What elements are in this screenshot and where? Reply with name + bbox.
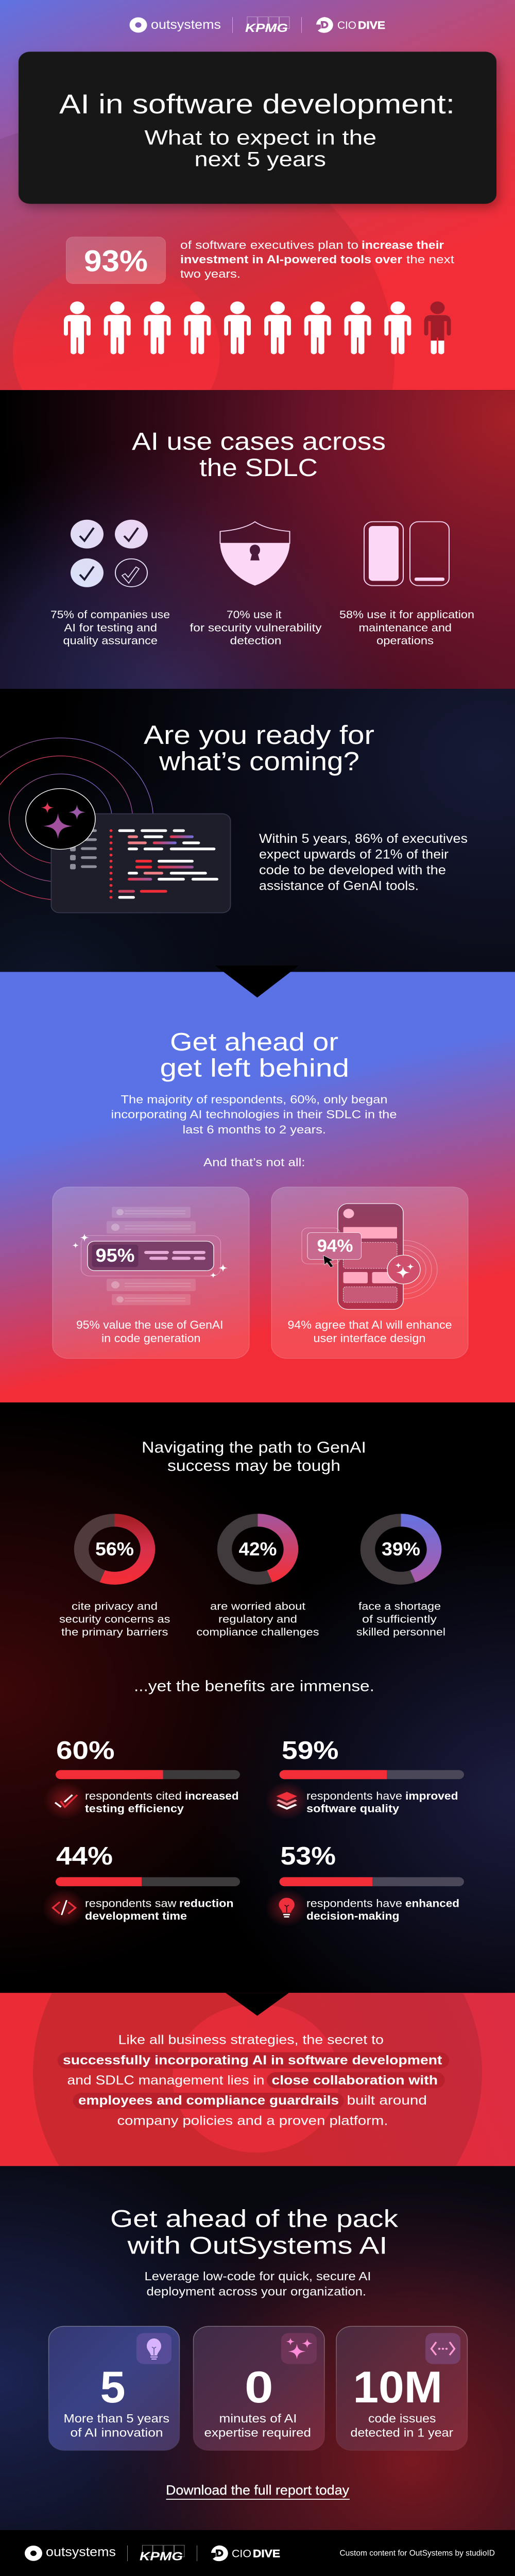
text: 75% use case: AI for testing and [64,622,157,634]
text: 56% caption: security concerns as [59,1613,170,1625]
benefit: 60% testing efficiency [44,1736,240,1820]
heading: Get ahead or [170,1028,338,1056]
benefit: 59% software quality [265,1736,464,1820]
text: 93% description: increase their [362,239,444,251]
logo: CIO Dive: CIO [232,2548,251,2560]
text: 58% use case: maintenance and [358,622,452,634]
card: 0 minutes [194,2326,324,2450]
benefit: 60% testing efficiency: increased [185,1790,239,1802]
logo: CIO Dive: CIO [337,19,356,31]
heading: get left behind [160,1054,349,1082]
donut: 39%: 39% [382,1539,420,1560]
callout text [58,2032,449,2128]
logo: KPMG: KPMG [140,2550,183,2563]
benefit: 53% decision-making [265,1842,464,1927]
text: 75% use case: quality assurance [63,635,158,647]
donut: 42%: 42% [239,1539,277,1560]
intro text: The majority of respondents, 60%, only began [121,1093,388,1106]
subtitle: next 5 years [195,148,326,171]
logo: CIO Dive [316,17,385,33]
text: 70% use case: detection [230,635,282,647]
intro text [144,2270,371,2298]
text: within 5 years: Within 5 years, 86% of executives [259,831,468,845]
card: 94% user interface [271,1187,468,1359]
text: 58% use case [339,608,474,647]
text: 56% caption [59,1600,170,1638]
heading [110,2205,399,2259]
intro text: incorporating AI technologies in their SDLC in the [111,1108,397,1121]
card: 0 minutes: minutes of AI [219,2412,297,2426]
panel: hero section [0,0,515,391]
card: 5 years: 5 [100,2362,126,2412]
benefit: 59% software quality: respondents have [306,1790,402,1802]
donut: 56% [81,1520,148,1578]
card: 5 years: More than 5 years [64,2412,169,2426]
panel: are you ready [0,689,515,972]
arrow: section pointer [226,1993,289,2016]
subheading: ...yet the benefits are immense. [134,1677,374,1694]
benefit: 60% testing efficiency: testing efficiency [85,1803,184,1815]
benefit: 59% software quality: improved [405,1790,458,1802]
text: 56% caption: the primary barriers [61,1626,168,1638]
heading [160,1028,349,1082]
heading: Navigating the path to GenAI [142,1438,366,1456]
text: 70% use case: for security vulnerability [190,622,322,634]
callout text: built around [347,2093,427,2108]
callout text: successfully incorporating AI in software development [63,2053,442,2067]
text: 39% caption: skilled personnel [356,1626,445,1638]
text: 39% caption: face a shortage [358,1600,441,1612]
card text [287,1319,452,1344]
subtitle [144,126,376,171]
benefit: 59% software quality: 59% [282,1736,339,1765]
icon: phones [364,522,449,586]
logo: outsystems [130,17,221,32]
card text: user interface design [313,1332,426,1344]
text: within 5 years: code to be developed with the [259,862,446,877]
logo: KPMG [245,17,289,35]
text: and that's not all: And that’s not all: [203,1156,305,1168]
logo: KPMG [140,2545,184,2563]
text: within 5 years: assistance of GenAI tools. [259,878,419,893]
icon: code dots [425,2333,460,2364]
callout text: company policies and a proven platform. [117,2113,388,2128]
code window [52,814,231,913]
text: 42% caption [197,1600,319,1638]
donut: 42% [225,1520,291,1578]
benefit: 60% testing efficiency: respondents cited [85,1790,182,1802]
benefit: 60% testing efficiency: 60% [56,1736,114,1765]
text: 93% description: two years. [180,267,241,280]
icon: security shield [220,522,289,586]
text: within 5 years [259,831,468,893]
benefit: 44% development time [42,1842,240,1927]
callout text: and SDLC management lies in [67,2073,265,2087]
panel: AI use cases [0,390,515,689]
icon: light bulb [136,2333,171,2364]
link: download the full report: Download the full report today [166,2483,350,2498]
benefit: 44% development time: respondents saw [85,1897,177,1909]
heading: with OutSystems AI [127,2232,387,2259]
text: 58% use case: 58% use it for application [339,608,474,621]
text: 42% caption: are worried about [210,1600,305,1612]
logo: outsystems [25,2544,116,2561]
heading: Are you ready for [144,721,374,750]
stat: 93% [66,237,166,284]
logo: CIO Dive [211,2546,280,2561]
text: 56% caption: cite privacy and [72,1600,158,1612]
heading: what’s coming? [159,747,359,776]
card text [76,1319,224,1344]
subtitle: What to expect in the [144,126,376,149]
text: 70% use case: 70% use it [227,608,282,621]
icon: four check marks [71,520,148,587]
card: 10M code issues [336,2326,468,2450]
intro text: last 6 months to 2 years. [182,1123,326,1136]
benefit: 53% decision-making: respondents have [306,1897,402,1909]
logo: KPMG: KPMG [245,22,288,35]
benefit: 44% development time: development time [85,1910,187,1922]
benefit: 44% development time: reduction [179,1897,234,1909]
intro text: Leverage low-code for quick, secure AI [144,2270,371,2283]
card: 5 years: of AI innovation [70,2426,163,2439]
illustration: phone UI: 94% [317,1236,353,1256]
logo: CIO Dive: DIVE [358,19,385,31]
card: 10M code issues: 10M [353,2362,442,2412]
illustration: phone UI [302,1204,437,1309]
intro text: deployment across your organization. [146,2285,366,2298]
text: 42% caption: regulatory and [218,1613,297,1625]
card: 0 minutes: 0 [245,2362,273,2412]
header logos [130,17,385,35]
logo: outsystems: outsystems [151,17,221,31]
card text: 95% value the use of GenAI [76,1319,224,1331]
illustration: 95% list [72,1207,228,1305]
panel: footer [0,2530,515,2576]
illustration: code window with AI sparkle [0,738,231,913]
panel: get ahead or get left behind [0,965,515,1402]
heading [144,721,374,776]
panel: get ahead of the pack [0,2166,515,2530]
intro text [111,1093,397,1136]
heading: AI use cases across [132,427,386,455]
card text: in code generation [101,1332,201,1344]
title card [19,52,500,208]
callout text: employees and compliance guardrails [78,2093,339,2108]
card: 0 minutes: expertise required [204,2426,311,2439]
card: 10M code issues: code issues [368,2412,436,2426]
benefit: 44% development time: 44% [56,1842,113,1870]
donut: 56%: 56% [95,1539,134,1560]
callout text: close collaboration with [272,2073,438,2087]
text: 93% description: the next [406,253,455,266]
benefit: 59% software quality: software quality [306,1803,399,1815]
credit: Custom content for OutSystems by studioID [340,2549,495,2557]
pictogram: 9 of 10 people [64,301,451,354]
text: 70% use case [190,608,322,647]
card: 5 years [48,2326,179,2450]
icon: AI sparkles [26,789,95,849]
text: 93% description [180,239,455,280]
callout text: Like all business strategies, the secret to [118,2032,384,2047]
heading [142,1438,366,1475]
illustration: 95% list: 95% [96,1245,135,1266]
benefit: 53% decision-making: decision-making [306,1910,400,1922]
benefit: 53% decision-making: 53% [280,1842,336,1870]
text: 93% description: of software executives plan to [180,239,358,251]
title: AI in software development: [59,89,455,119]
card text: 94% agree that AI will enhance [287,1319,452,1331]
text: 75% use case [50,608,170,647]
heading: the SDLC [199,453,318,481]
text: 93% description: investment in AI-powered tools over [180,253,402,266]
text: 39% caption [356,1600,445,1638]
text: within 5 years: expect upwards of 21% of their [259,846,449,861]
text: 58% use case: operations [376,635,434,647]
icon: sparkles [281,2333,317,2364]
heading: Get ahead of the pack [110,2205,399,2232]
card: 10M code issues: detected in 1 year [350,2426,454,2439]
heading: success may be tough [167,1456,340,1475]
logo: outsystems: outsystems [46,2544,116,2559]
text: 42% caption: compliance challenges [197,1626,319,1638]
stat: 93%: 93% [84,245,148,278]
arrow: section pointer [215,965,299,997]
panel: business strategy callout [0,1993,515,2166]
text: 75% use case: 75% of companies use [50,608,170,621]
panel: challenges and benefits [0,1402,515,1993]
card: 95% code generation [53,1187,249,1359]
text: 39% caption: of sufficiently [362,1613,437,1625]
heading [132,427,386,481]
donut: 39% [368,1520,434,1578]
benefit: 53% decision-making: enhanced [405,1897,459,1909]
logo: CIO Dive: DIVE [253,2548,280,2560]
